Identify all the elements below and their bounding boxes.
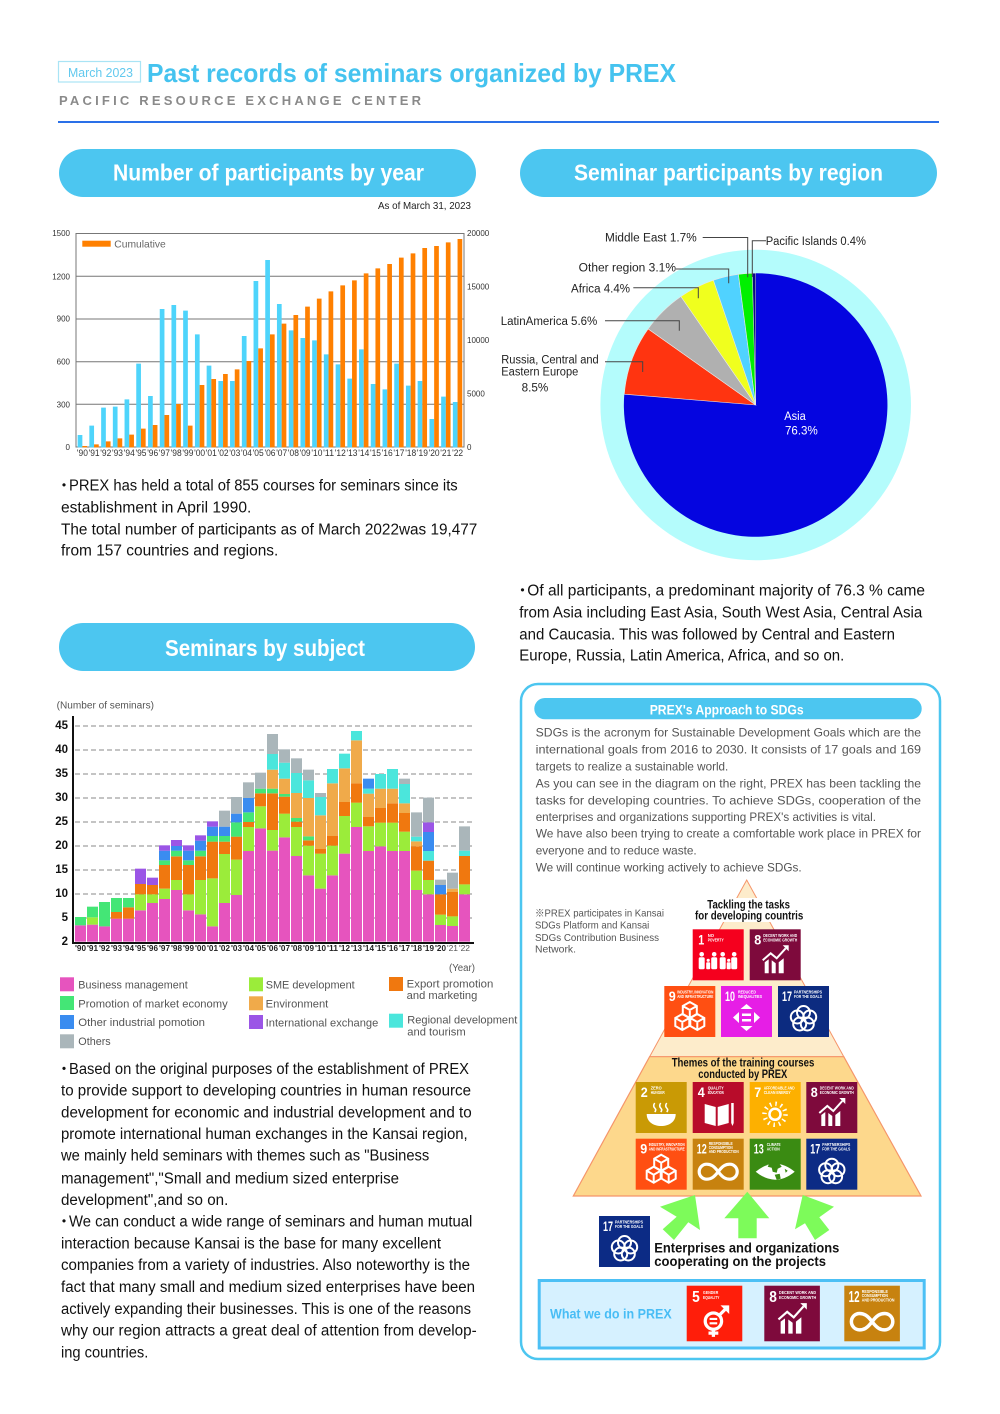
legend: cumulative [82,238,166,250]
icon: SDG 5 gender equality: 5 [692,1289,700,1306]
year labels: '18 [411,943,422,953]
heading: seminars by subject [59,623,475,671]
text block: seminar subject summary: interaction because Kansai is the base for many excellent [61,1235,442,1252]
year labels [75,943,470,953]
legend item: export promotion and marketing [389,977,493,1002]
icon: SDG 4 quality education: 4 [698,1084,705,1100]
year labels: '19 [423,943,434,953]
icon: SDG 17 partnerships [806,1139,857,1190]
year labels: '19 [417,448,428,458]
legend item: other industrial promotion: Other industrial pomotion [78,1017,205,1029]
heading: seminars by subject: Seminars by subject [165,635,365,661]
heading: seminar participants by region: Seminar participants by region [574,160,883,186]
icon: SDG 13 climate action: ACTION [767,1147,780,1152]
year labels: '98 [171,943,182,953]
label: Africa: Africa 4.4% [571,284,630,296]
arrow: right, toward pyramid [795,1195,834,1240]
label: Russia, Central and Eastern Europe: Eastern Europe [501,367,578,379]
SDGs description text: targets to realize a sustainable world. [536,760,728,774]
SDG pyramid diagram [573,880,921,1196]
text block: seminar subject summary: We can conduct a wide range of seminars and human mutual [69,1214,472,1231]
text block: participants summary [56,478,477,560]
x axis unit: (Year) [449,963,475,974]
text block: participants summary: PREX has held a total of 855 courses for seminars since its [69,478,458,495]
legend item: international exchange: International exchange [266,1018,378,1030]
y axis labels: 10 [55,888,68,900]
icon: SDG 7 clean energy: 7 [754,1084,761,1100]
legend item: regional development and tourism: Regional development [407,1014,517,1026]
icon: SDG 12 responsible consumption [693,1139,744,1190]
year labels: '14 [363,943,374,953]
year labels: '18 [405,448,416,458]
icon: SDG 2 zero hunger: HUNGER [651,1090,665,1095]
legend item: regional development and tourism [389,1014,517,1039]
year labels: '02 [218,448,229,458]
year labels: '11 [327,943,338,953]
icon: SDG 8 decent work: 8 [769,1289,777,1306]
note: Kansai SDGs platform: Network. [535,944,576,956]
header [58,58,677,108]
year labels: '01 [206,448,217,458]
text block: seminar subject summary: to provide support to developing countries in human resource [61,1083,471,1100]
label: Middle East: Middle East 1.7% [605,233,697,245]
icon: SDG 12 responsible consumption: 12 [697,1141,707,1157]
y axis labels: 40 [55,744,68,756]
year labels: '12 [339,943,350,953]
label: enterprises and organizations: Enterprises and organizations [654,1239,839,1255]
legend item: promotion of market economy: Promotion of market economy [78,998,228,1010]
legend: cumulative: Cumulative [114,238,166,250]
icon: SDG 17 partnerships, cooperating enterprises: FOR THE GOALS [615,1224,643,1229]
slice: Other region [713,274,756,405]
SDGs description text: tasks for developing countries. To achieve SDGs, cooperation of the [536,793,921,807]
left axis labels: 0 [66,443,71,452]
year labels: '98 [171,448,182,458]
icon: SDG 12 responsible consumption: AND PRODUCTION [862,1298,894,1303]
slice: Latin America [648,296,756,405]
label: themes of the training courses: Themes of the training courses [672,1058,814,1070]
year labels: '00 [195,943,206,953]
year labels: '07 [279,943,290,953]
arrow: left, toward pyramid [660,1195,700,1240]
heading: number of participants by year: Number of participants by year [113,160,424,186]
legend: seminar subjects [60,977,517,1048]
text block: region summary: from Asia including East Asia, South West Asia, Central Asia [519,604,923,621]
label: tackling the tasks [695,899,803,922]
panel heading: PREX's Approach to SDGs [650,701,804,717]
SDGs description text: We have also been trying to create a comfortable work place in PREX for [536,827,921,841]
text block: region summary: Of all participants, a predominant majority of 76.3 % came [527,583,925,600]
year labels: '03 [229,448,240,458]
icon: SDG 8 decent work: ECONOMIC GROWTH [820,1090,854,1095]
icon: SDG 4 quality education: QUALITY [708,1086,724,1090]
year labels: '22 [452,448,463,458]
year labels: '91 [89,448,100,458]
icon: SDG 8 decent work: ECONOMIC GROWTH [763,937,797,942]
year labels: '09 [303,943,314,953]
year labels: '21 [440,448,451,458]
icon: SDG 8 decent work: DECENT WORK AND [763,933,797,938]
y axis labels [55,720,69,948]
icon: SDG 17 partnerships: 17 [782,988,792,1004]
text block: seminar subject summary: development",and so on. [61,1192,228,1209]
y axis labels: 35 [55,768,69,780]
icon: SDG 17 partnerships: PARTNERSHIPS [794,990,822,994]
right axis labels: 0 [467,443,472,452]
note: Kansai SDGs platform: SDGs Platform and Kansai [535,919,649,931]
label: Russia, Central and Eastern Europe [501,354,599,394]
text block: seminar subject summary: fact that many small and medium sized enterprises have been [61,1279,475,1296]
year labels: '10 [311,448,322,458]
icon: SDG 17 partnerships: FOR THE GOALS [794,994,822,999]
year labels: '92 [99,943,110,953]
icon: SDG 17 partnerships, cooperating enterprises: 17 [603,1218,613,1234]
year labels: '22 [459,943,470,953]
icon: SDG 1 no poverty: NO [708,933,715,938]
icon: SDG 10 reduced inequalities: INEQUALITIES [738,994,762,999]
legend item: export promotion and marketing: Export promotion [407,979,493,991]
year labels: '04 [241,448,252,458]
year labels: '13 [346,448,358,458]
icon: SDG 17 partnerships [778,986,829,1037]
year labels: '16 [382,448,393,458]
icon: SDG 17 partnerships: FOR THE GOALS [822,1147,850,1152]
label: enterprises and organizations [654,1239,839,1269]
icon: SDG 12 responsible consumption: RESPONSIBLE [709,1141,733,1146]
heading: number of participants by year [59,149,476,197]
year labels: '17 [393,448,404,458]
year labels: '15 [370,448,381,458]
year labels: '08 [291,943,302,953]
y axis labels: 20 [55,840,68,852]
icon: SDG 9 industry [636,1139,687,1190]
icon: SDG 5 gender equality: GENDER [703,1290,719,1295]
year labels: '97 [159,448,170,458]
y axis labels: 45 [55,720,69,732]
text block: seminar subject summary: development for economic and industrial development and to [61,1104,472,1121]
year labels: '04 [243,943,254,953]
icon: SDG 12 responsible consumption: 12 [849,1289,860,1306]
icon: SDG 2 zero hunger: ZERO [651,1086,662,1090]
icon: SDG 8 decent work: 8 [811,1084,818,1100]
SDGs description text [536,726,921,875]
label: Asia: Asia [784,411,806,423]
year labels: '95 [135,943,146,953]
icon: SDG 9 industry: AND INFRASTRUCTURE [649,1147,685,1152]
slice: Middle East [738,273,756,405]
text block: seminar subject summary: actively expanding their businesses. This is one of the reasons [61,1301,471,1318]
label: Asia [784,411,818,437]
icon: SDG 13 climate action: 13 [754,1141,764,1157]
year labels: '93 [111,943,122,953]
legend item: environment: Environment [266,999,328,1011]
year labels: '08 [288,448,299,458]
icon: SDG 13 climate action: CLIMATE [767,1142,781,1147]
panel: PREX's approach to SDGs [521,684,940,1359]
year labels: '99 [182,448,193,458]
year labels: '07 [276,448,287,458]
label: Asia: 76.3% [785,425,818,437]
panel: what we do in PREX [539,1280,924,1348]
icon: SDG 10 reduced inequalities: 10 [725,988,735,1004]
label: tackling the tasks: for developing countris [695,910,803,922]
text block: participants summary: establishment in April 1990. [61,499,251,516]
left axis labels [52,229,71,452]
note: Kansai SDGs platform: ※PREX participates in Kansai [535,908,664,920]
label: enterprises and organizations: cooperating on the projects [654,1253,826,1269]
label: Latin America: LatinAmerica 5.6% [501,316,597,328]
icon: SDG 7 clean energy: CLEAN ENERGY [764,1090,791,1095]
icon: SDG 1 no poverty [693,929,744,980]
SDGs description text: SDGs is the acronym for Sustainable Development Goals which are the [536,726,921,740]
year labels: '99 [183,943,194,953]
year labels: '02 [219,943,230,953]
year labels [77,448,463,458]
legend item: regional development and tourism: and tourism [407,1027,466,1039]
stacked bars, 1990 to 2022 [80,731,464,942]
icon: SDG 12 responsible consumption [844,1286,900,1341]
year labels: '92 [100,448,111,458]
title: Past records of seminars organized by PREX [147,58,677,88]
icon: SDG 7 clean energy: AFFORDABLE AND [764,1086,795,1090]
pie chart: participants by region [501,233,911,560]
left axis labels: 1500 [52,229,71,238]
text block: seminar subject summary: ing countries. [61,1344,148,1361]
year labels: '96 [147,448,158,458]
text block: participants summary: ・ [56,478,72,495]
pyramid lower tier [573,1057,921,1196]
SDGs description text: international goals from 2016 to 2030. It consists of 17 goals and 169 [536,743,921,757]
year labels: '14 [358,448,369,458]
icon: SDG 12 responsible consumption: CONSUMPTION [862,1293,888,1298]
icon: SDG 12 responsible consumption: AND PRODUCTION [709,1149,739,1154]
text block: seminar subject summary [56,1061,477,1361]
text block: seminar subject summary: Based on the original purposes of the establishment of PREX [69,1061,470,1078]
axis title: (Number of seminars) [57,700,154,711]
icon: SDG 9 industry: 9 [640,1141,647,1157]
icon: SDG 8 decent work: DECENT WORK AND [779,1290,817,1295]
year labels: '93 [112,448,123,458]
year labels: '06 [267,943,278,953]
y axis labels: 15 [55,864,69,876]
arrow: center, toward pyramid [724,1192,769,1238]
year labels: '20 [429,448,440,458]
note: Kansai SDGs platform [535,908,664,956]
year labels: '01 [207,943,218,953]
icon: SDG 5 gender equality: EQUALITY [703,1295,719,1300]
slice: Asia [624,273,887,537]
icon: SDG 1 no poverty: POVERTY [708,937,724,942]
right axis labels [467,229,490,452]
icon: SDG 17 partnerships, cooperating enterprises [599,1216,650,1267]
right axis labels: 20000 [467,229,490,238]
year labels: '20 [435,943,446,953]
left axis labels: 300 [57,400,71,409]
text block: seminar subject summary: promote international human exchanges in the Kansai region, [61,1126,468,1143]
year labels: '97 [159,943,170,953]
SDGs description text: We will continue working actively to achieve SDGs. [536,861,802,875]
year labels: '95 [136,448,146,458]
panel heading [534,698,922,719]
SDGs description text: enterprises and organizations supporting PREX's activities is vital. [536,810,876,824]
year labels: '05 [253,448,264,458]
note: Kansai SDGs platform: SDGs Contribution Business [535,932,659,944]
legend item: others [60,1034,111,1048]
text block: participants summary: from 157 countries and regions. [61,543,278,560]
series: cumulative participants [85,239,460,447]
SDGs description text: everyone and to reduce waste. [536,844,697,858]
year labels: '16 [387,943,398,953]
y axis labels: 30 [55,792,68,804]
year labels: '10 [315,943,326,953]
icon: SDG 9 industry: INDUSTRY, INNOVATION [649,1142,685,1147]
icon: SDG 17 partnerships: 17 [810,1141,820,1157]
icon: SDG 1 no poverty: 1 [698,931,704,947]
legend item: export promotion and marketing: and marketing [407,990,477,1002]
year labels: '12 [335,448,346,458]
left axis labels: 1200 [52,272,71,281]
year labels: '09 [300,448,311,458]
pyramid upper tier [650,880,844,1057]
icon: SDG 12 responsible consumption: RESPONSIBLE [862,1289,888,1294]
SDGs description text: As you can see in the diagram on the right, PREX has been tackling the [536,776,921,790]
icon: SDG 8 decent work: ECONOMIC GROWTH [779,1295,816,1300]
label: tackling the tasks: Tackling the tasks [707,899,790,911]
text block: seminar subject summary: companies from a variety of industries. Also noteworthy is the [61,1257,470,1274]
icon: SDG 9 industry [664,986,715,1037]
legend item: business management: Business management [78,979,188,991]
year labels: '94 [124,448,135,458]
icon: SDG 8 decent work [764,1286,820,1341]
date badge: March 2023 [68,65,133,80]
slice: Russia, Central and Eastern Europe [624,329,756,405]
year labels: '96 [147,943,158,953]
year labels: '11 [323,448,334,458]
text block: region summary: Europe, Russia, Latin America, Africa, and so on. [519,648,844,665]
series: annual participants [80,260,455,447]
label: Russia, Central and Eastern Europe: Russia, Central and [501,354,599,366]
label: Russia, Central and Eastern Europe: 8.5% [522,382,548,394]
y axis labels: 5 [62,912,69,924]
text block: seminar subject summary: why our region attracts a great deal of attention from develop- [60,1323,477,1340]
text block: seminar subject summary: ・ [56,1214,72,1231]
icon: SDG 9 industry: AND INFRASTRUCTURE [677,994,713,999]
pie outer ring [600,250,911,560]
icon: SDG 9 industry: 9 [669,988,676,1004]
left axis labels: 600 [57,357,71,366]
text block: region summary: and Caucasia. This was followed by Central and Eastern [519,626,895,643]
year labels: '91 [87,943,98,953]
text block: region summary [515,583,925,665]
text block: seminar subject summary: ・ [56,1061,72,1078]
label: themes of the training courses [672,1058,814,1081]
legend item: environment [249,996,328,1011]
year labels: '06 [264,448,276,458]
label: Other region: Other region 3.1% [579,263,676,275]
slice: Pacific Islands [752,273,756,405]
year labels: '05 [255,943,266,953]
label: Pacific Islands: Pacific Islands 0.4% [766,236,866,248]
year labels: '00 [194,448,205,458]
y axis labels: 2 [62,936,68,948]
left axis labels: 900 [57,315,71,324]
organization subtitle: PACIFIC RESOURCE EXCHANGE CENTER [59,93,422,108]
label: what we do: What we do in PREX [550,1305,672,1321]
right axis labels: 15000 [467,282,490,291]
icon: SDG 2 zero hunger [636,1082,687,1133]
icon: SDG 5 gender equality [687,1286,742,1341]
y axis labels: 25 [55,816,69,828]
year labels: '90 [77,448,88,458]
icon: SDG 17 partnerships, cooperating enterprises: PARTNERSHIPS [615,1220,643,1224]
date badge [58,62,140,82]
text block: region summary: ・ [515,583,530,600]
icon: SDG 10 reduced inequalities [721,986,772,1037]
year labels: '03 [231,943,242,953]
icon: SDG 17 partnerships: PARTNERSHIPS [822,1142,850,1147]
icon: SDG 4 quality education: EDUCATION [708,1090,724,1095]
icon: SDG 8 decent work [806,1082,857,1133]
legend item: others: Others [78,1036,111,1048]
icon: SDG 10 reduced inequalities: REDUCED [738,990,756,994]
stacked bar chart: seminars by subject [55,700,475,974]
icon: SDG 8 decent work: 8 [754,931,761,947]
icon: SDG 7 clean energy [750,1082,801,1133]
year labels: '90 [75,943,86,953]
year labels: '13 [351,943,362,953]
icon: SDG 2 zero hunger: 2 [641,1084,648,1100]
year labels: '94 [123,943,134,953]
right axis labels: 10000 [467,336,490,345]
icon: SDG 8 decent work [750,929,801,980]
year labels: '17 [399,943,410,953]
year labels: '21 [447,943,458,953]
bar chart: participants by year [52,229,490,458]
slice: Africa [681,280,756,405]
icon: SDG 13 climate action [750,1139,801,1190]
icon: SDG 4 quality education [693,1082,744,1133]
icon: SDG 12 responsible consumption: CONSUMPTION [709,1145,733,1150]
right axis labels: 5000 [467,390,485,399]
text block: seminar subject summary: we mainly held seminars with themes such as "Business [60,1148,430,1165]
icon: SDG 9 industry: INDUSTRY, INNOVATION [677,990,713,994]
date note: As of March 31, 2023 [378,200,471,212]
chart axes [73,716,474,943]
text block: seminar subject summary: management","Small and medium sized enterprise [61,1170,399,1187]
icon: SDG 8 decent work: DECENT WORK AND [820,1086,854,1090]
heading: seminar participants by region [520,149,937,197]
leader lines [605,238,766,372]
year labels: '15 [375,943,386,953]
text block: participants summary: The total number of participants as of March 2022was 19,477 [61,521,477,538]
label: themes of the training courses: conducted by PREX [698,1069,788,1081]
legend item: SME development: SME development [266,979,355,991]
